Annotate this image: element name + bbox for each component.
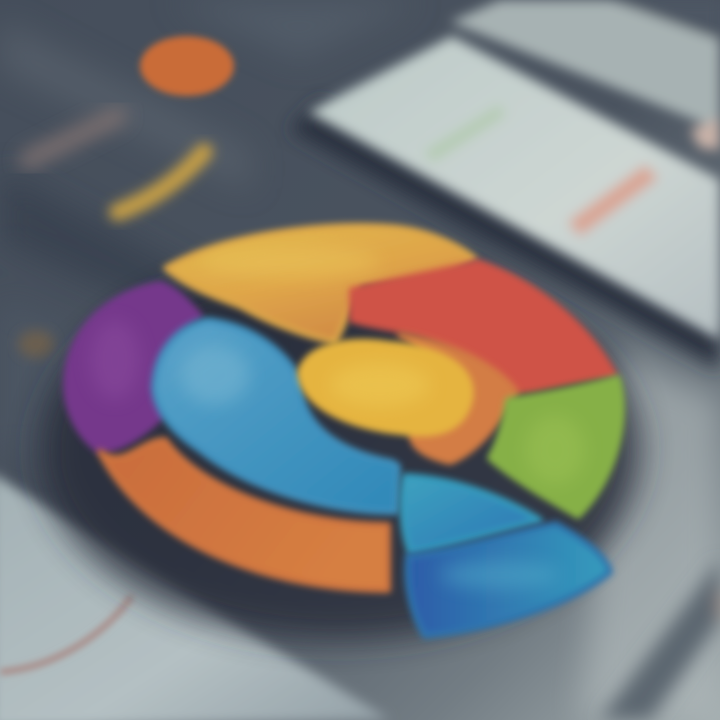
slice: deep blue wedge bbox=[407, 524, 610, 636]
panel: paper top right bbox=[308, 0, 720, 340]
slice: yellow top bbox=[166, 226, 474, 342]
slice: orange arc bbox=[100, 440, 388, 590]
slice: orange inner bbox=[400, 335, 516, 462]
slice: purple bbox=[66, 284, 200, 450]
icon: yellow bar bbox=[118, 152, 204, 212]
icon: faded pink bar bbox=[28, 116, 118, 160]
slice: red bbox=[352, 262, 614, 392]
slice: light blue ring bbox=[154, 320, 398, 512]
panel: paper bottom left bbox=[0, 472, 390, 720]
slice: green bbox=[490, 378, 622, 516]
pie shadow bbox=[40, 260, 640, 640]
highlights bbox=[90, 246, 585, 589]
bottom right blur marks bbox=[600, 560, 720, 720]
icon: orange blob top bbox=[140, 36, 234, 96]
slice: centre yellow bbox=[298, 340, 473, 436]
shadow under top paper bbox=[290, 100, 720, 370]
icon: faded orange dot bbox=[18, 330, 54, 358]
pie chart bbox=[66, 226, 622, 636]
paper marks bbox=[425, 105, 505, 162]
slice: teal wedge bbox=[402, 476, 540, 552]
red sketch line bbox=[0, 596, 132, 672]
